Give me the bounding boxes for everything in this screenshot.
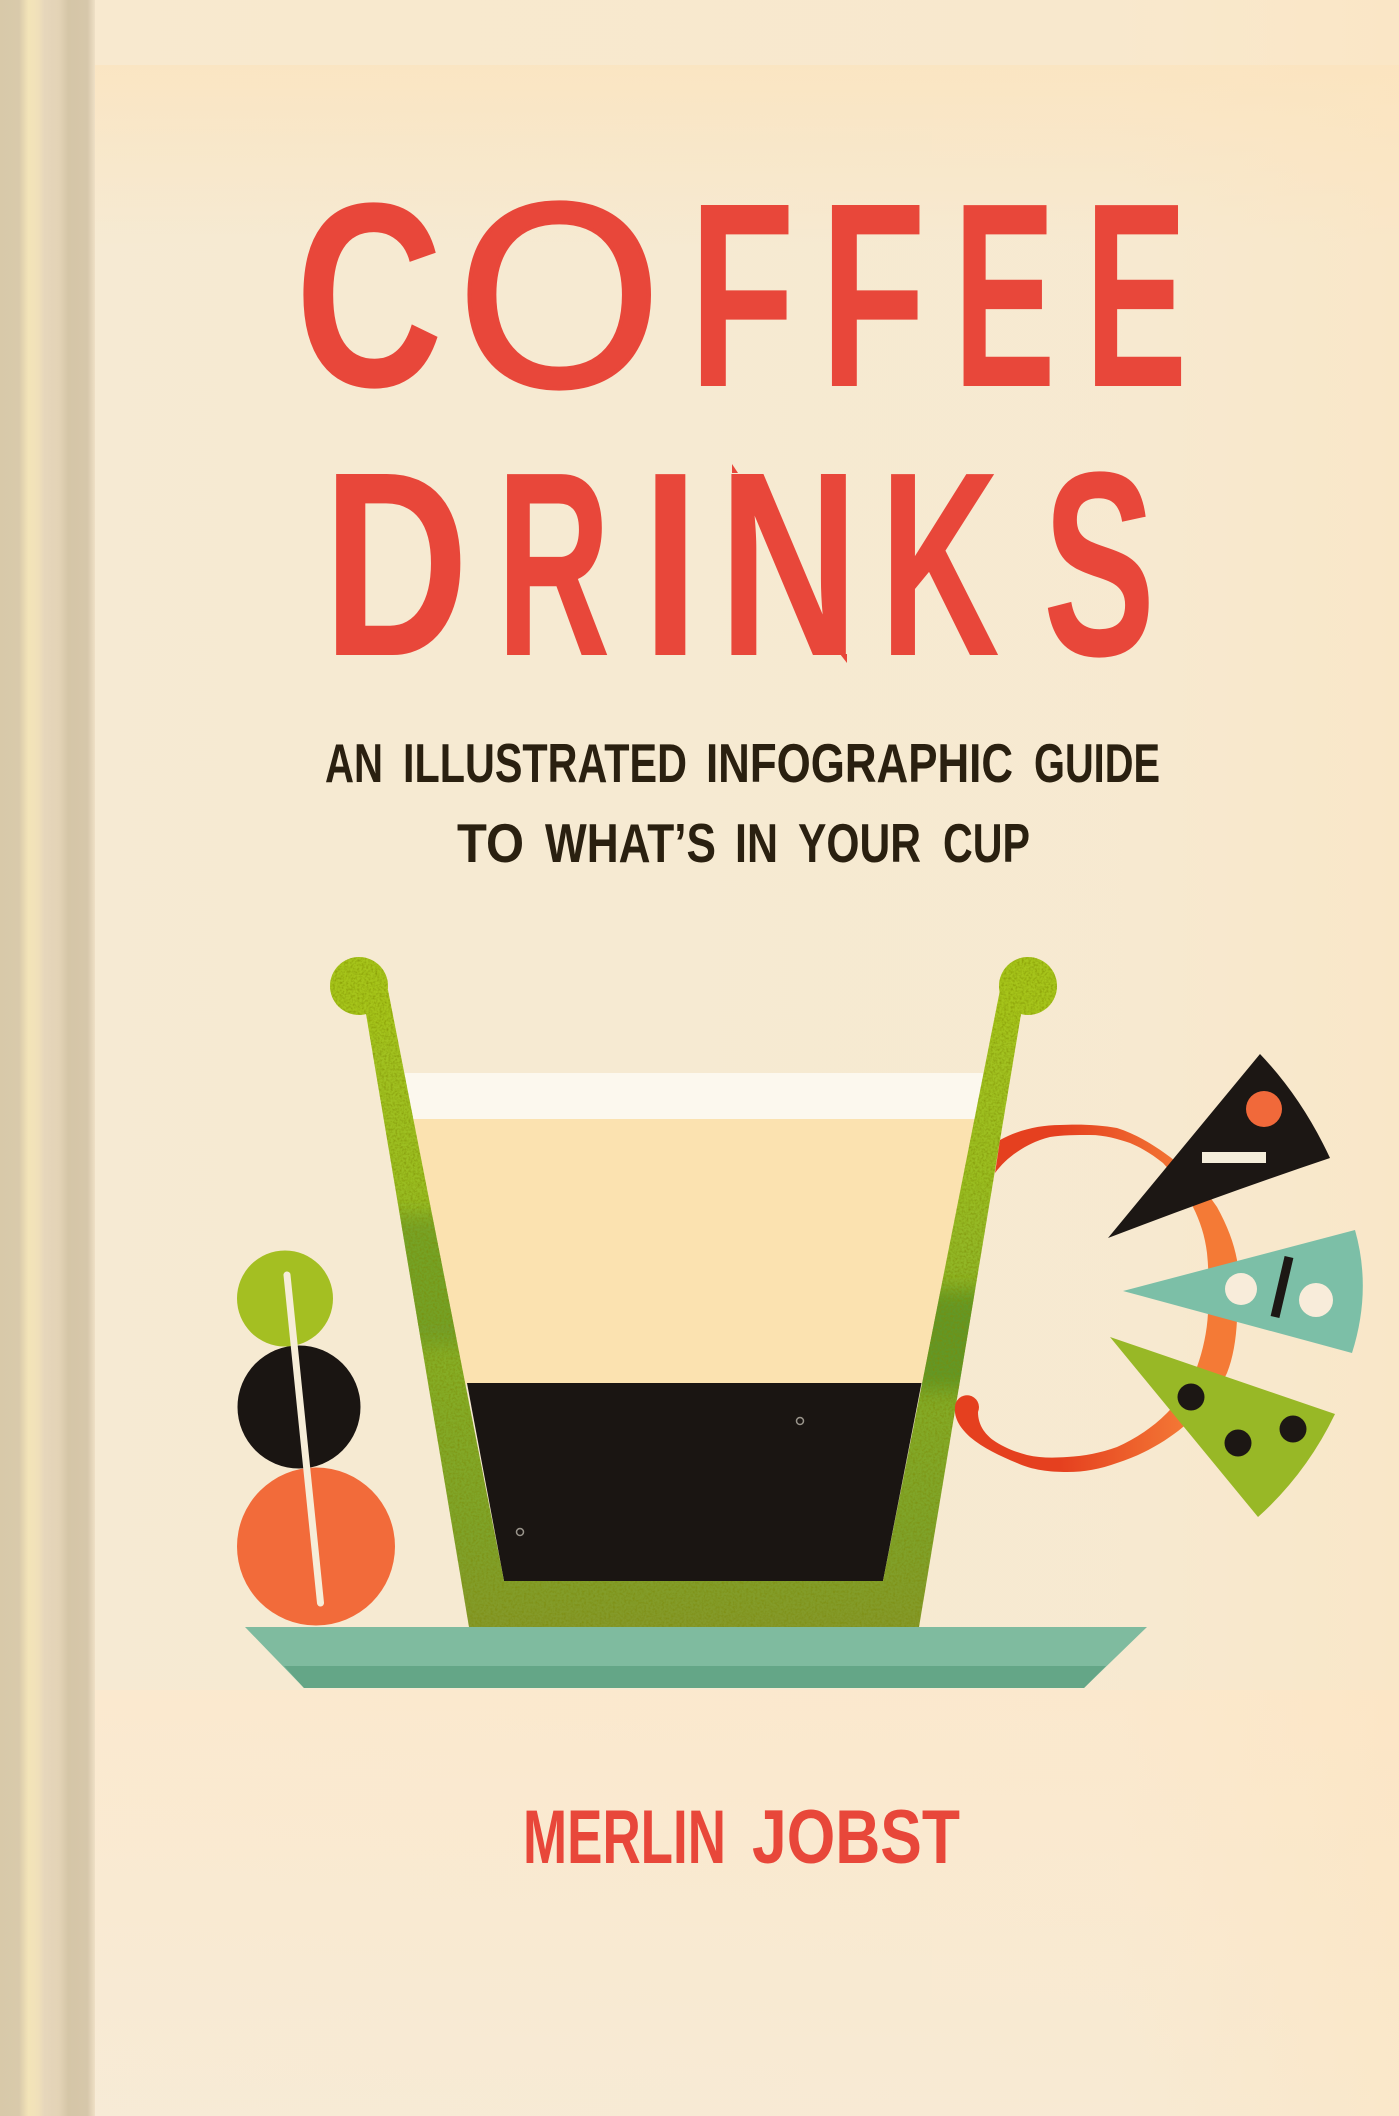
title: DRINKS: S bbox=[1043, 417, 1155, 711]
title: COFFEE bbox=[295, 147, 1187, 443]
subtitle: IN bbox=[735, 812, 778, 874]
cup body walls bbox=[330, 957, 1057, 1627]
author name: JOBST bbox=[752, 1795, 960, 1880]
icon: teal triangle bbox=[1123, 1230, 1363, 1353]
icon: black triangle bbox=[1108, 1054, 1330, 1238]
subtitle: GUIDE bbox=[1034, 732, 1160, 794]
subtitle: ILLUSTRATED bbox=[403, 732, 687, 794]
cup latte layer bbox=[412, 1119, 976, 1384]
title: COFFEE: E bbox=[1085, 148, 1187, 442]
subtitle: CUP bbox=[943, 812, 1030, 874]
cup handle bbox=[955, 1125, 1239, 1472]
subtitle: AN bbox=[325, 732, 383, 794]
icon: cocktail stick with three balls bbox=[237, 1250, 395, 1626]
title: COFFEE: F bbox=[689, 150, 795, 443]
illustration: coffee cup bbox=[330, 957, 1057, 1627]
cup coffee layer bbox=[467, 1383, 922, 1581]
subtitle: YOUR bbox=[798, 812, 921, 874]
title: COFFEE: O bbox=[457, 148, 662, 442]
book spine bbox=[0, 0, 95, 2116]
saucer bbox=[245, 1627, 1147, 1688]
title: DRINKS: K bbox=[880, 417, 1000, 711]
title: DRINKS: R bbox=[496, 417, 610, 711]
title: DRINKS: N bbox=[718, 419, 859, 712]
subtitle: INFOGRAPHIC bbox=[706, 732, 1013, 794]
author name bbox=[523, 1795, 960, 1880]
subtitle: WHAT’S bbox=[545, 812, 716, 874]
title: DRINKS: D bbox=[323, 417, 469, 711]
coffee bubble right bbox=[796, 1418, 804, 1424]
title: COFFEE: C bbox=[295, 147, 443, 442]
title: DRINKS: I bbox=[642, 418, 699, 712]
title: COFFEE: E bbox=[953, 148, 1056, 442]
title: COFFEE: F bbox=[820, 150, 926, 443]
author name: MERLIN bbox=[523, 1795, 726, 1880]
cup foam layer bbox=[404, 1073, 984, 1119]
title: DRINKS bbox=[323, 417, 1155, 712]
subtitle bbox=[325, 732, 1160, 874]
subtitle: TO bbox=[457, 812, 524, 874]
coffee bubble left bbox=[516, 1528, 524, 1536]
icon: green triangle bbox=[1110, 1337, 1335, 1517]
